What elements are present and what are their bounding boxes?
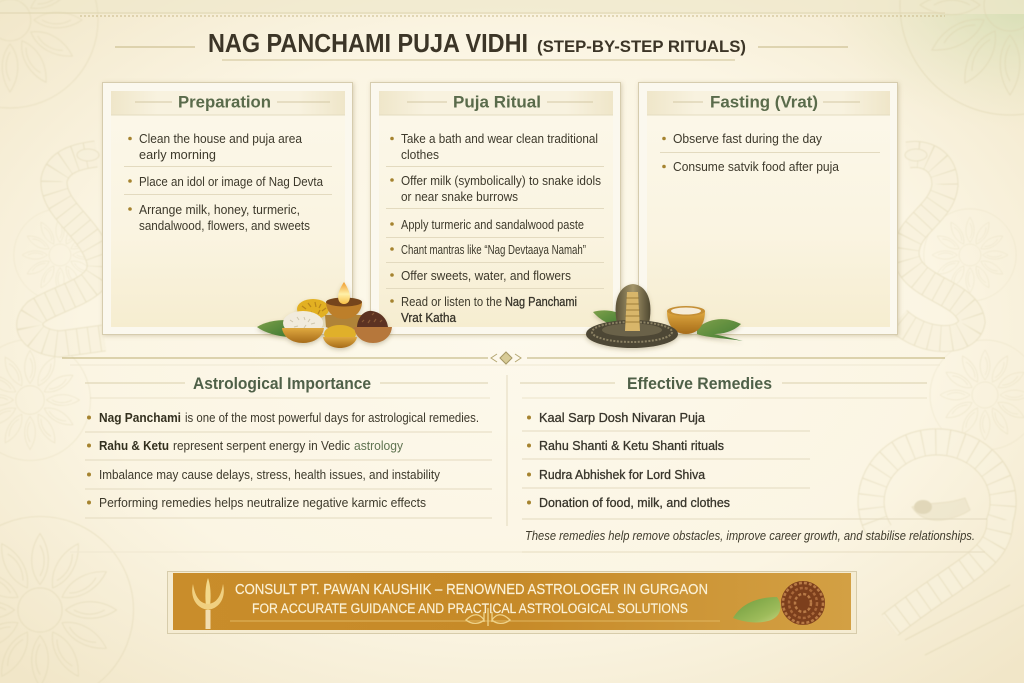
list: puja ritual steps: Chant mantras like “Nag Devtaaya Namah” (401, 242, 586, 257)
illustration: puja offerings with diya and bowls (257, 282, 392, 348)
list: astrological points: Performing remedies helps neutralize negative karmic effects (99, 495, 426, 510)
list: preparation steps: Place an idol or image of Nag Devta (139, 174, 324, 189)
heading: preparation: Preparation (178, 92, 271, 112)
list: astrological points: is one of the most powerful days for astrological remedies. (185, 410, 479, 425)
icon: dark spice bowl (354, 311, 392, 343)
list: preparation steps: Clean the house and puja area (139, 131, 303, 146)
icon: trishul (192, 578, 224, 629)
icon: right leaf (697, 319, 743, 341)
icon: diya lamp (325, 282, 364, 331)
list: astrological points: Rahu & Ketu (99, 438, 169, 453)
list: astrological points: represent serpent energy in Vedic (173, 438, 350, 453)
list: remedies (522, 410, 987, 519)
icon: rice bowl (282, 311, 324, 343)
top dotted border (0, 13, 945, 16)
icon: yellow flowers (297, 299, 329, 319)
banner: consult: FOR ACCURATE GUIDANCE AND PRACTICAL ASTROLOGICAL SOLUTIONS (252, 601, 688, 616)
panel: fasting (638, 82, 898, 334)
icon: left leaf (593, 310, 624, 326)
title: (STEP-BY-STEP RITUALS) (537, 38, 746, 56)
list: puja ritual steps (386, 131, 604, 325)
panel: preparation (102, 82, 352, 334)
icon: rudraksha bead (781, 581, 825, 625)
list: fasting steps: Consume satvik food after puja (673, 159, 840, 174)
list: astrological points (85, 410, 492, 518)
list: puja ritual steps: Offer sweets, water, and flowers (401, 268, 571, 283)
heading: astrological importance: Astrological Importance (193, 374, 371, 393)
list: puja ritual steps: Read or listen to the (401, 294, 502, 309)
list: preparation steps: sandalwood, flowers, and sweets (139, 218, 310, 233)
list: remedies: Donation of food, milk, and clothes (539, 495, 730, 510)
heading: puja ritual: Puja Ritual (453, 92, 541, 112)
icon: turmeric bowl (323, 325, 357, 348)
list: puja ritual steps: Nag Panchami (505, 294, 577, 309)
list: remedies: Kaal Sarp Dosh Nivaran Puja (539, 410, 706, 425)
heading: effective remedies: Effective Remedies (627, 374, 772, 393)
panel: puja ritual (370, 82, 620, 334)
title (115, 28, 848, 60)
illustration: coiled serpent idol and milk bowl (586, 284, 743, 348)
panel: astrological importance (85, 374, 492, 518)
panel: effective remedies (520, 374, 987, 552)
icon: milk bowl (667, 306, 705, 334)
list: puja ritual steps: or near snake burrows (401, 189, 518, 204)
list: astrological points: Nag Panchami (99, 410, 181, 425)
list: remedies: Rudra Abhishek for Lord Shiva (539, 467, 706, 482)
icon: green leaf (733, 597, 780, 622)
icon: serpent ornament (466, 608, 510, 626)
icon: leaf (257, 320, 288, 337)
section divider ornament (62, 352, 945, 365)
list: puja ritual steps: Vrat Katha (401, 310, 457, 325)
list: preparation steps (124, 131, 332, 233)
list: astrological points: Imbalance may cause delays, stress, health issues, and instability (99, 467, 440, 482)
heading: fasting: Fasting (Vrat) (710, 92, 818, 112)
icon: serpent (586, 284, 678, 348)
list: fasting steps: Observe fast during the day (673, 131, 822, 146)
list: puja ritual steps: clothes (401, 147, 439, 162)
list: puja ritual steps: Offer milk (symbolically) to snake idols (401, 173, 601, 188)
list: puja ritual steps: Take a bath and wear clean traditional (401, 131, 598, 146)
list: astrological points: astrology (354, 438, 403, 453)
list: preparation steps: early morning (139, 147, 216, 162)
list: preparation steps: Arrange milk, honey, turmeric, (139, 202, 300, 217)
banner: consult (168, 572, 856, 634)
list: puja ritual steps: Apply turmeric and sandalwood paste (401, 217, 584, 232)
list: fasting steps (660, 131, 880, 174)
list: remedies: Rahu Shanti & Ketu Shanti rituals (539, 438, 724, 453)
title: NAG PANCHAMI PUJA VIDHI (208, 28, 528, 58)
banner text: CONSULT PT. PAWAN KAUSHIK – RENOWNED ASTROLOGER IN GURGAON (235, 581, 708, 598)
vertical divider (506, 375, 508, 526)
